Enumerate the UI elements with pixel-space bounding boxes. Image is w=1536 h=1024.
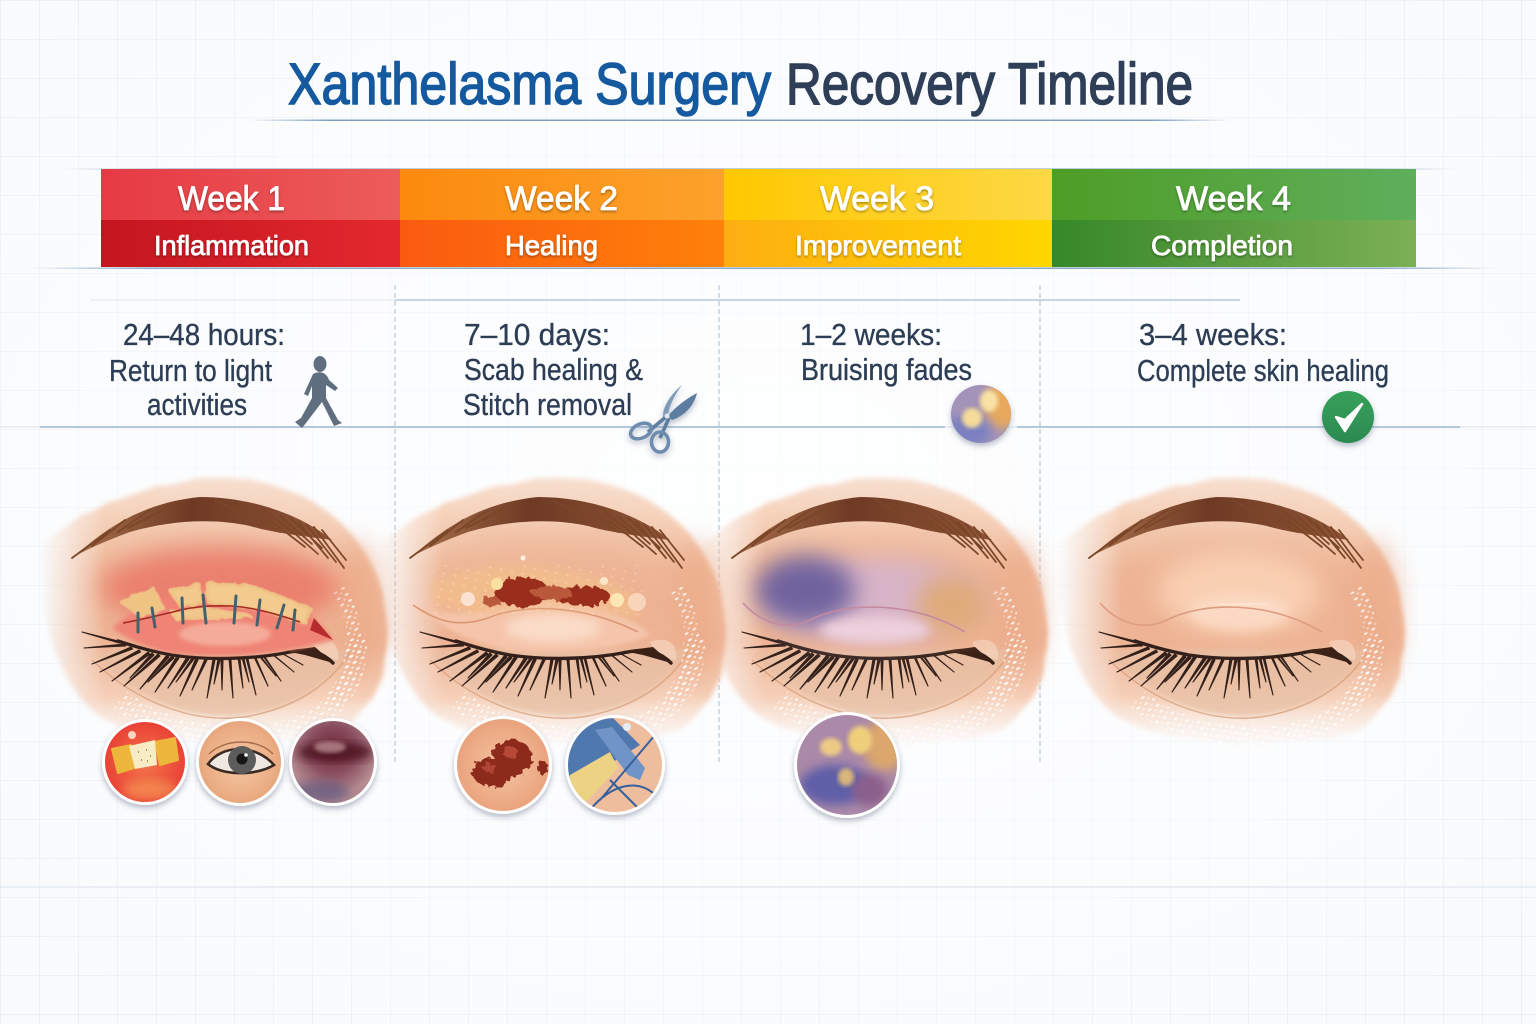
text: week 1 milestone: activities — [147, 387, 247, 422]
title: Xanthelasma Surgery — [288, 52, 771, 117]
healing bumps — [461, 556, 646, 611]
week 1 header — [101, 169, 400, 267]
scab — [483, 577, 610, 607]
week 1 header: Week 1 — [178, 180, 285, 218]
text: week 1 milestone: Return to light — [109, 353, 272, 388]
detail: scab close-up — [454, 716, 552, 814]
week 4 header — [1052, 169, 1416, 267]
text: week 2 milestone: Scab healing & — [464, 352, 643, 387]
text: week 4 milestone: Complete skin healing — [1137, 353, 1389, 388]
text: week 2 milestone: Stitch removal — [463, 387, 632, 422]
week 3 header — [724, 169, 1052, 267]
eye illustration: week 4 complete healing — [1052, 478, 1405, 745]
detail: dark bruised scar — [288, 718, 378, 808]
icon: green check — [1322, 391, 1374, 443]
text: week 4 milestone — [1137, 317, 1389, 388]
text: week 2 milestone — [463, 317, 643, 422]
icon: fading bruise — [948, 385, 1014, 449]
text: week 3 milestone: Bruising fades — [801, 352, 972, 387]
text: week 1 milestone: 24–48 hours: — [123, 317, 285, 352]
text: week 3 milestone: 1–2 weeks: — [800, 317, 942, 352]
detail: fading bruise close-up — [794, 712, 907, 818]
week 2 header: Week 2 — [505, 180, 618, 218]
text: week 3 milestone — [800, 317, 972, 387]
text: week 2 milestone: 7–10 days: — [464, 317, 610, 352]
detail: bandage on inflamed skin — [100, 718, 190, 808]
eye illustration: week 2 scab healing — [373, 478, 726, 745]
eye illustration: week 1 inflamed with stitches — [35, 478, 388, 745]
week 4 header: Completion — [1151, 230, 1293, 261]
week 3 header: Improvement — [795, 230, 961, 261]
week 4 header: Week 4 — [1176, 180, 1291, 218]
icon: scissors — [628, 385, 697, 452]
week 3 header: Week 3 — [820, 180, 934, 218]
week 1 header: Inflammation — [154, 230, 309, 261]
detail: open eye — [195, 718, 285, 808]
text: week 1 milestone — [109, 317, 285, 422]
text: week 4 milestone: 3–4 weeks: — [1139, 317, 1287, 352]
detail: stitch removal tool — [565, 715, 665, 815]
icon: walking person — [295, 356, 342, 428]
week 2 header: Healing — [505, 230, 598, 261]
title — [250, 52, 1230, 121]
eye illustration: week 3 bruising — [695, 478, 1048, 745]
title: Recovery Timeline — [786, 52, 1193, 117]
timeline header bar — [30, 168, 1500, 269]
week 2 header — [400, 169, 724, 267]
